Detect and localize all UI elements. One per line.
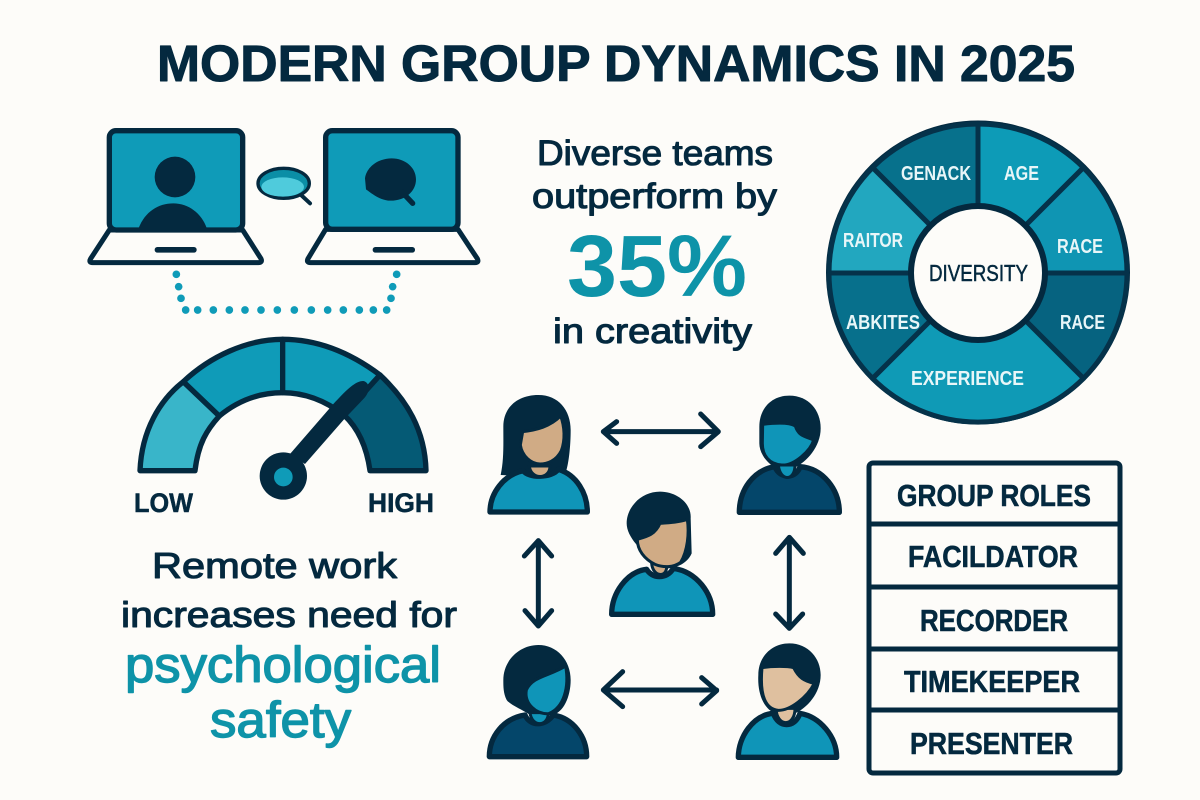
diversity wheel: RACE: [1060, 312, 1105, 334]
diversity wheel: RACE: [1057, 236, 1103, 258]
text block: remote work: increases need for: [121, 594, 457, 635]
diversity wheel: EXPERIENCE: [911, 368, 1024, 390]
text block: remote work: Remote work: [152, 545, 398, 586]
text block: remote work: [121, 545, 457, 748]
diversity wheel: ABKITES: [846, 312, 920, 334]
stat callout: diverse teams: Diverse teams: [537, 134, 773, 173]
text block: remote work: psychological: [125, 637, 441, 693]
gauge: psychological safety level: HIGH: [368, 488, 434, 518]
panel: group roles: PRESENTER: [910, 726, 1073, 761]
panel: group roles: FACILDATOR: [908, 539, 1078, 574]
gauge: psychological safety level: LOW: [134, 488, 193, 518]
icon: person bottom left: [489, 645, 587, 757]
stat callout: diverse teams: [532, 134, 778, 351]
diversity wheel: GENACK: [901, 163, 971, 185]
icon: person bottom right: [738, 643, 837, 757]
icon: person top right: [739, 396, 839, 512]
panel: group roles: [869, 463, 1120, 773]
panel: group roles: RECORDER: [920, 603, 1068, 638]
title: MODERN GROUP DYNAMICS IN 2025: [157, 35, 1075, 92]
diversity wheel: DIVERSITY: [929, 260, 1028, 286]
icon: person top left: [490, 395, 587, 512]
text block: remote work: safety: [210, 692, 351, 748]
icon: speech bubble: [258, 168, 310, 203]
team network: [489, 395, 839, 757]
diversity wheel: [826, 120, 1130, 424]
panel: group roles: TIMEKEEPER: [904, 664, 1080, 699]
stat callout: diverse teams: outperform by: [532, 177, 778, 216]
arrows between team members: [524, 414, 803, 707]
icon: right laptop: [307, 131, 478, 263]
dotted connector: [172, 270, 400, 314]
video call illustration: [90, 131, 478, 314]
diversity wheel: AGE: [1004, 163, 1039, 185]
icon: left laptop: [90, 131, 261, 263]
panel: group roles: GROUP ROLES: [897, 478, 1091, 513]
icon: person centre: [612, 492, 713, 614]
stat callout: diverse teams: in creativity: [553, 312, 753, 351]
gauge: psychological safety level: [134, 339, 434, 518]
diversity wheel: RAITOR: [843, 230, 903, 252]
stat callout: diverse teams: 35%: [567, 218, 747, 315]
